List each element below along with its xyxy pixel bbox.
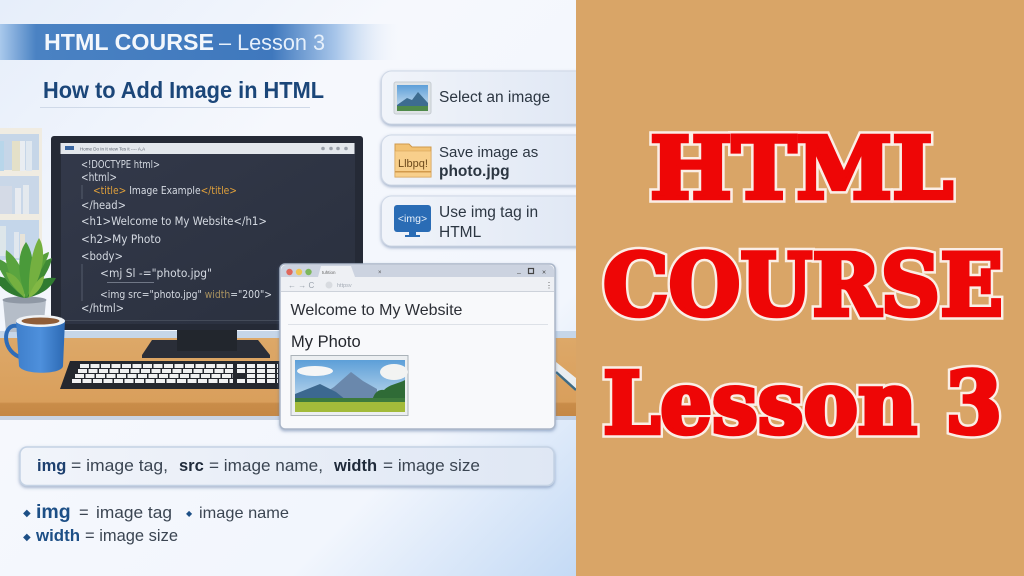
icon: folder: Llbpq! xyxy=(398,158,428,170)
heading: how to add image: How to Add Image in HTML xyxy=(43,77,324,103)
code listing: <html> xyxy=(81,170,117,184)
legend box: = image tag, xyxy=(71,456,168,475)
title banner: HTML COURSE xyxy=(44,29,214,55)
bullet list: = xyxy=(79,504,89,522)
title: HTML: HTML xyxy=(650,119,953,219)
step card: use img tag: HTML xyxy=(439,224,482,241)
desk xyxy=(0,331,576,420)
legend box xyxy=(20,447,554,486)
browser window: ← → C xyxy=(288,281,314,290)
photo: landscape xyxy=(291,356,408,416)
bullet list: = image size xyxy=(85,527,178,545)
monitor: Home Do In It view Tes it ---- A,A xyxy=(80,146,145,152)
title: HTML: HTML xyxy=(650,119,953,219)
bullet list: img xyxy=(36,501,71,523)
title: Lesson 3: Lesson 3 xyxy=(603,354,1002,454)
code listing: <title> Image Example</title> xyxy=(93,185,237,197)
code listing xyxy=(81,159,272,315)
title: COURSE: COURSE xyxy=(603,236,1003,336)
icon: img tag monitor: <img> xyxy=(398,213,427,225)
icon: folder xyxy=(395,144,431,177)
panel: lesson illustration xyxy=(0,0,592,576)
browser window: ⋮ xyxy=(545,281,553,290)
monitor stand xyxy=(142,328,270,358)
code listing: <img src="photo.jpg" width="200"> xyxy=(100,288,272,301)
bullet list: width xyxy=(35,527,80,545)
bullet list: image tag xyxy=(96,504,172,522)
code listing: <!DOCTYPE html> xyxy=(81,159,160,171)
code listing: </head> xyxy=(81,198,126,212)
code listing: <h2>My Photo xyxy=(81,232,161,246)
browser window: – xyxy=(517,270,521,277)
notebook xyxy=(556,362,576,390)
bullet list: image name xyxy=(199,505,289,522)
step card: select an image xyxy=(382,71,592,124)
title banner xyxy=(0,24,400,60)
browser window xyxy=(280,264,555,429)
step card: save image: Save image as xyxy=(439,144,538,161)
browser heading: Welcome to My Website xyxy=(290,302,463,319)
plant xyxy=(0,238,56,332)
browser subheading: My Photo xyxy=(291,333,361,351)
legend box: img xyxy=(37,457,66,475)
icon: img tag monitor xyxy=(394,205,431,237)
legend box: width xyxy=(333,457,377,475)
step card: use img tag: Use img tag in xyxy=(439,204,538,221)
step card: select an image: Select an image xyxy=(439,89,550,106)
code listing: <h1>Welcome to My Website</h1> xyxy=(81,214,267,228)
browser window: × xyxy=(378,270,382,276)
legend box: = image size xyxy=(383,456,480,475)
step card: save image xyxy=(382,135,592,185)
code listing: </html> xyxy=(81,301,124,315)
keyboard xyxy=(60,361,284,389)
bullet list: ◆ xyxy=(23,508,31,519)
title: Lesson 3: Lesson 3 xyxy=(603,354,1002,454)
browser window: httpsv xyxy=(337,283,352,289)
monitor xyxy=(51,136,363,358)
legend box: src xyxy=(179,457,204,475)
bullet list xyxy=(23,501,289,545)
bookshelf xyxy=(0,128,42,260)
icon: landscape picture xyxy=(394,82,431,114)
title banner: – Lesson 3 xyxy=(219,30,325,55)
step cards xyxy=(382,71,592,246)
title: COURSE: COURSE xyxy=(603,236,1003,336)
browser window: tuhtion xyxy=(322,270,336,275)
step card: save image: photo.jpg xyxy=(439,163,510,180)
code listing: <mj Sl -="photo.jpg" xyxy=(100,266,212,280)
icon: coffee mug xyxy=(6,315,65,373)
bullet list: ◆ xyxy=(23,532,31,543)
code listing: <body> xyxy=(81,249,123,263)
bullet list: ◆ xyxy=(186,509,193,518)
legend box: = image name, xyxy=(209,456,323,475)
step card: use img tag xyxy=(382,196,592,246)
panel: course title xyxy=(576,0,1024,576)
browser window: × xyxy=(542,270,546,276)
